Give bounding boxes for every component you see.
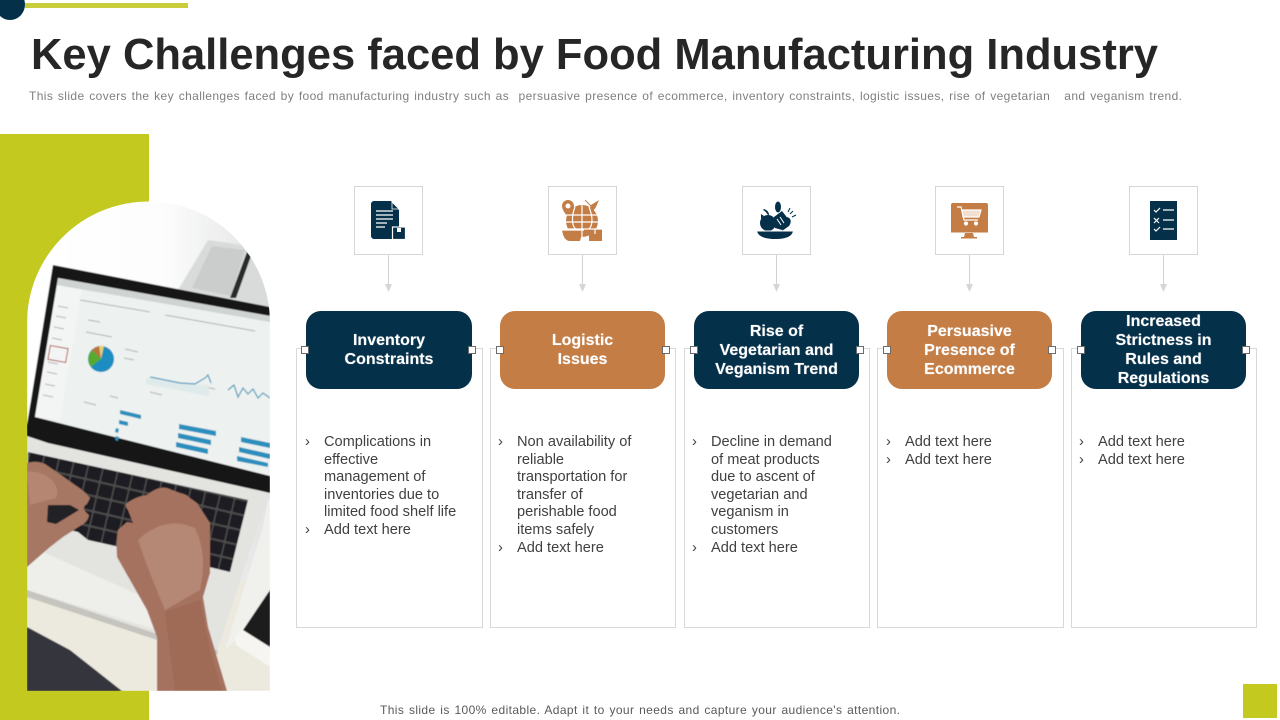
icon: checklist (1129, 186, 1198, 255)
heading: Increased Strictness in Rules and Regulations: Rules and (1125, 351, 1202, 368)
heading: Logistic Issues: Issues (558, 351, 607, 368)
connector handle (468, 346, 476, 354)
connector handle (883, 346, 891, 354)
text block: regulations (1079, 434, 1185, 468)
text block: vegetarian: › (692, 434, 697, 450)
laptop screen (35, 278, 270, 476)
heading: Inventory Constraints: Inventory (353, 332, 425, 349)
keyboard (27, 452, 248, 572)
table (27, 580, 270, 691)
right hand (117, 488, 227, 691)
pie chart (88, 346, 114, 372)
bottom-right green square (1243, 684, 1277, 718)
text block: vegetarian: of meat products (711, 452, 820, 468)
icon: ecommerce cart on monitor (935, 186, 1004, 255)
heading: Increased Strictness in Rules and Regulations: Strictness in (1115, 332, 1212, 349)
text block: inventory: inventories due to (324, 487, 439, 503)
left green band (0, 134, 149, 720)
background object (178, 240, 270, 312)
text block: ecommerce: Add text here (905, 434, 992, 450)
heading: Increased Strictness in Rules and Regulations: Increased (1126, 313, 1201, 330)
text block: regulations: Add text here (1098, 434, 1185, 450)
text block: vegetarian (692, 434, 832, 556)
card body (1071, 348, 1257, 628)
top accent bar (25, 3, 188, 8)
heading: Persuasive Presence of Ecommerce: Ecommerce (924, 360, 1015, 378)
text block: inventory: limited food shelf life (324, 504, 456, 520)
top accent circle (0, 0, 25, 20)
text block: logistic: transfer of (517, 487, 583, 503)
text block: logistic (498, 434, 632, 556)
connector handle (1048, 346, 1056, 354)
text block: vegetarian: Decline in demand (711, 434, 832, 450)
icon: fruit and vegetable bowl (742, 186, 811, 255)
heading: Inventory Constraints: Constraints (345, 351, 433, 368)
screen sidebar (34, 286, 57, 418)
heading: Rise of Vegetarian and Veganism Trend: Rise of (750, 322, 803, 340)
text block: inventory: Add text here (324, 522, 411, 538)
text block: logistic: › (498, 434, 503, 450)
laptop base (27, 436, 250, 649)
text block: inventory: Complications in (324, 434, 431, 450)
text block: inventory: effective (324, 452, 378, 468)
text block: ecommerce (886, 434, 992, 468)
connector handle (690, 346, 698, 354)
text block: regulations: › (1079, 452, 1084, 468)
line charts (146, 378, 209, 396)
heading: Persuasive Presence of Ecommerce (887, 311, 1052, 389)
photo: hands typing on laptop (27, 202, 270, 691)
heading: Persuasive Presence of Ecommerce: Presence of (924, 342, 1015, 358)
text block: logistic: transportation for (517, 469, 627, 485)
footer note: This slide is 100% editable. Adapt it to your needs and capture your audience's attention. (380, 703, 900, 717)
heading: Rise of Vegetarian and Veganism Trend: Vegetarian and (720, 342, 833, 358)
heading: Inventory Constraints (306, 311, 472, 389)
connector handle (496, 346, 504, 354)
heading: Rise of Vegetarian and Veganism Trend: Veganism Trend (715, 360, 838, 378)
text block: ecommerce: Add text here (905, 452, 992, 468)
text block: vegetarian: vegetarian and (711, 487, 808, 503)
panel: Increased Strictness (1071, 348, 1257, 628)
arrow (773, 255, 780, 292)
connector handle (1242, 346, 1250, 354)
heading: Persuasive Presence of Ecommerce: Persuasive (927, 322, 1012, 340)
connector handle (1077, 346, 1085, 354)
text block: regulations: › (1079, 434, 1084, 450)
arrow (966, 255, 973, 292)
text block: inventory: management of (324, 469, 425, 485)
panel: Rise of Vegetarian (684, 348, 870, 628)
card body (490, 348, 676, 628)
connector handle (301, 346, 309, 354)
icon: globe logistics (548, 186, 617, 255)
text block: logistic: Add text here (517, 540, 604, 556)
text block: ecommerce: › (886, 434, 891, 450)
arrow (385, 255, 392, 292)
connector handle (662, 346, 670, 354)
text block: logistic: items safely (517, 522, 594, 538)
arrow (579, 255, 586, 292)
panel: Persuasive Presence (877, 348, 1064, 628)
card body (684, 348, 870, 628)
icon: document with package (354, 186, 423, 255)
text block: vegetarian: customers (711, 522, 778, 538)
panel: Inventory Constraints (296, 348, 483, 628)
text block: vegetarian: › (692, 540, 697, 556)
text block: vegetarian: due to ascent of (711, 469, 815, 485)
text block: logistic: › (498, 540, 503, 556)
heading: Increased Strictness in Rules and Regulations (1081, 311, 1246, 389)
text block: vegetarian: veganism in (711, 504, 789, 520)
card body (877, 348, 1064, 628)
left hand (27, 462, 90, 567)
heading: Logistic Issues (500, 311, 665, 389)
text block: ecommerce: › (886, 452, 891, 468)
text block: logistic: perishable food (517, 504, 617, 520)
text block: logistic: reliable (517, 452, 564, 468)
laptop lid bezel (27, 265, 270, 493)
text block: vegetarian: Add text here (711, 540, 798, 556)
connector handle (856, 346, 864, 354)
subtitle: This slide covers the key challenges faced by food manufacturing industry such as persuasive presence of ecommerce, inventory constraints, logistic issues, rise of vegetarian and veganism trend. (29, 89, 1182, 103)
text block: inventory (305, 434, 456, 538)
text block: regulations: Add text here (1098, 452, 1185, 468)
text block: logistic: Non availability of (517, 434, 631, 450)
arrow (1160, 255, 1167, 292)
title: Key Challenges faced by Food Manufacturing Industry (31, 30, 1159, 79)
text block: inventory: › (305, 522, 310, 538)
heading: Rise of Vegetarian and Veganism Trend (694, 311, 859, 389)
heading: Logistic Issues: Logistic (552, 332, 613, 349)
text block: inventory: › (305, 434, 310, 450)
sleeve (27, 627, 122, 691)
panel: Logistic Issues (490, 348, 676, 628)
tablet and phone (225, 500, 270, 650)
screen bar charts (115, 410, 270, 467)
heading: Increased Strictness in Rules and Regulations: Regulations (1118, 370, 1209, 387)
card body (296, 348, 483, 628)
